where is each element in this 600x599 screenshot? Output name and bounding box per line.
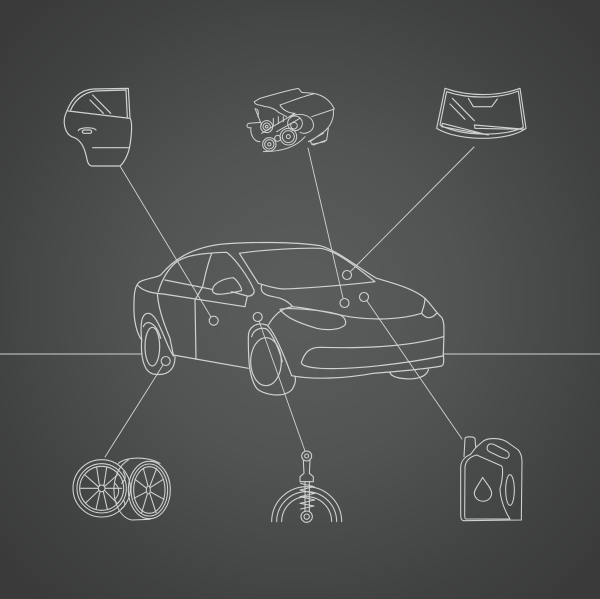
side mirror <box>212 278 242 294</box>
hood lines <box>261 285 422 325</box>
beltline <box>137 285 247 307</box>
connector markers <box>161 270 368 366</box>
rear wheel <box>141 313 175 374</box>
car illustration <box>134 242 444 395</box>
icon: wheels <box>73 458 170 520</box>
front wheel <box>248 324 295 395</box>
front bumper and grille <box>301 337 443 379</box>
car body outline <box>134 242 444 378</box>
icon: oil canister <box>461 437 522 521</box>
connector lines <box>105 147 474 457</box>
headlamp <box>280 309 346 330</box>
ground line <box>0 353 600 355</box>
icon: car door <box>64 88 132 166</box>
left wheel <box>73 460 130 517</box>
icon: shock absorber <box>272 451 342 522</box>
icon: windshield <box>437 88 526 138</box>
right wheel <box>128 461 170 519</box>
icon: engine <box>247 88 334 152</box>
windshield <box>239 248 375 289</box>
right headlight <box>422 298 437 318</box>
rear door edge <box>157 293 248 368</box>
side windows <box>158 252 254 359</box>
